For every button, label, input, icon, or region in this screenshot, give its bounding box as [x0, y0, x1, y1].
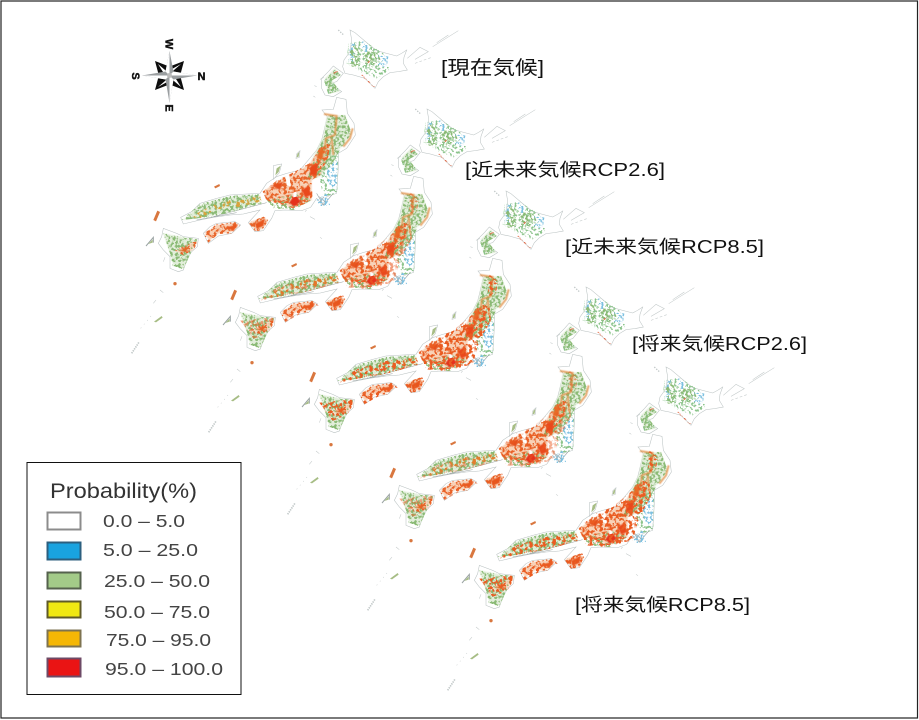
- map label: near-future RCP2.6: [近未来気候RCP2.6]: [465, 160, 665, 180]
- compass letter S: S: [129, 72, 141, 80]
- map label: far-future RCP8.5: [将来気候RCP8.5]: [575, 595, 750, 615]
- legend row 0-5: 0.0 – 5.0: [103, 511, 185, 531]
- legend row 5-25: 5.0 – 25.0: [103, 540, 198, 560]
- map label: far-future RCP2.6: [将来気候RCP2.6]: [632, 334, 807, 354]
- map: current climate: [132, 30, 458, 353]
- compass letter N: N: [198, 71, 206, 83]
- legend heading: Probability(%): [50, 480, 197, 503]
- compass letter W: W: [162, 39, 174, 50]
- legend row 50-75: [48, 602, 210, 622]
- map: far-future climate RCP2.6: [368, 287, 694, 610]
- map: near-future climate RCP2.6: [209, 109, 535, 432]
- legend row 75-95: 75.0 – 95.0: [106, 630, 211, 650]
- legend row 95-100: 95.0 – 100.0: [105, 659, 223, 679]
- legend panel: [27, 462, 241, 694]
- legend row 25-50: [48, 571, 210, 591]
- legend row 0-5: [48, 511, 185, 531]
- legend row 95-100: [48, 658, 223, 679]
- legend row 50-75: 50.0 – 75.0: [104, 602, 210, 622]
- legend row 75-95: [48, 630, 211, 650]
- map label: near-future RCP8.5: [近未来気候RCP8.5]: [565, 237, 764, 257]
- icon: compass rose: [129, 39, 206, 112]
- legend row 5-25: [48, 540, 198, 560]
- map: far-future climate RCP8.5: [448, 367, 774, 690]
- map label: current climate: [現在気候]: [441, 57, 544, 79]
- map: near-future climate RCP8.5: [288, 191, 614, 514]
- legend row 25-50: 25.0 – 50.0: [104, 571, 210, 591]
- compass letter E: E: [162, 104, 174, 112]
